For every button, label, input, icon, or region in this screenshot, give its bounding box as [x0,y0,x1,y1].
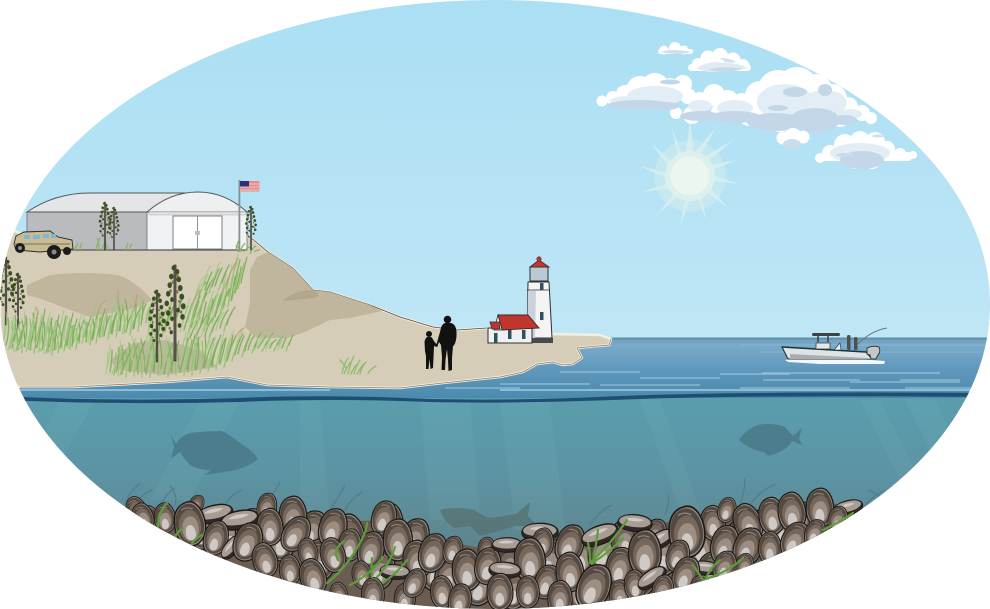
oyster reef [122,487,864,609]
cloud: small top [658,42,693,54]
underwater [0,398,990,609]
dune grass [2,254,376,377]
trees [0,202,257,328]
boat: hull [782,347,872,359]
keeper house [488,315,539,343]
lighthouse: windows [540,283,544,320]
boat: wake [785,358,885,364]
dune shadow: left [27,273,152,317]
lighthouse: base [532,338,553,343]
sky [0,0,990,340]
hangar: front roof [147,192,247,212]
lighthouse: cap [530,260,549,267]
boat: anglers [847,335,858,350]
sun [640,122,739,226]
boat: fishing rod [857,328,887,345]
hangar: side roof [27,193,190,212]
lighthouse: tower [527,282,552,338]
fish: right [739,424,802,456]
adult and child silhouettes [424,316,457,371]
boat: outboard motor [867,346,880,359]
cloud: small middle [776,128,810,149]
sea surface [0,338,990,398]
reef bed [100,500,890,609]
beach grass by hangar [74,238,260,254]
cloud: right [815,131,917,169]
lighthouse: lantern [530,267,548,281]
fishing boat [782,328,887,364]
hangar: doors [173,216,222,249]
hangar: side wall [27,212,148,250]
dune shadow: right [245,252,382,338]
hangar [27,192,247,250]
hangar: front wall [147,212,247,250]
trees on dune [148,265,186,362]
cloud: upper [688,48,751,72]
humvee [14,231,73,259]
flag and pole [238,180,260,252]
fish: shark silhouette [440,502,538,536]
fish: left [171,431,258,475]
eelgrass blades [158,503,853,585]
clouds [596,42,917,169]
waterline band [0,392,990,403]
cloud: large [596,67,877,132]
land: dunes and beach [0,226,611,388]
boat: t-top [812,333,841,350]
dune shadow: lower [110,340,217,375]
lighthouse [488,257,553,343]
background seagrass silhouettes [125,478,890,525]
underwater light rays [20,400,975,530]
